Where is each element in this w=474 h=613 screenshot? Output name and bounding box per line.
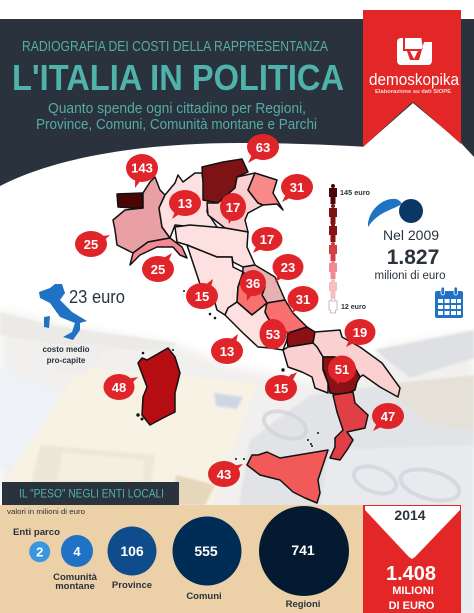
- region: Basilicata: [323, 357, 360, 395]
- bubble: Liguria 25: [142, 253, 174, 282]
- main title: L'ITALIA IN POLITICA: [12, 57, 344, 98]
- value bubbles: [75, 134, 404, 487]
- bubble: Puglia 19: 19: [353, 325, 367, 340]
- header title block: [12, 39, 344, 133]
- bubble: Trentino 63: 63: [256, 140, 270, 155]
- region: Lazio: [225, 302, 288, 350]
- region: Sardegna: [138, 348, 180, 425]
- header band: [0, 19, 474, 186]
- region: Liguria: [130, 238, 187, 265]
- logo wordmark: demoskopika: [369, 70, 459, 89]
- bubble: Abruzzo 31: [288, 286, 318, 313]
- bubble: Umbria 36: 36: [246, 276, 260, 291]
- bubble: Friuli 31: [281, 174, 313, 202]
- region: Trentino-Alto Adige: [202, 159, 248, 203]
- caption: costo medio: [42, 345, 90, 354]
- 23 euro value: 23 euro: [69, 287, 125, 307]
- panel: 2014 total: [363, 505, 461, 613]
- circle: Comuni: 555: [194, 543, 218, 559]
- bubble: Basilicata 51: 51: [335, 362, 349, 377]
- heading tab: [2, 482, 179, 505]
- circle: Comunità montane: [53, 535, 98, 592]
- bubble: Sicilia 43: 43: [217, 467, 231, 482]
- region: Valle d'Aosta: [117, 193, 143, 208]
- region: Veneto: [207, 173, 263, 232]
- caption: [42, 345, 90, 365]
- bubble: Umbria 36: [240, 270, 266, 301]
- subtitle: [36, 101, 317, 133]
- bubble: Abruzzo 31: 31: [296, 292, 310, 307]
- bubble: Campania 15: 15: [274, 381, 288, 396]
- bubble: Liguria 25: 25: [151, 262, 165, 277]
- icon: calendar: [435, 287, 463, 318]
- circle: Enti parco: Enti parco: [13, 527, 60, 538]
- circle: Enti parco: 2: [36, 544, 43, 560]
- panel: local bodies: [0, 482, 364, 613]
- bubble: Toscana 15: [186, 279, 218, 309]
- bubble: Emilia-Romagna 17: [252, 227, 282, 253]
- circle: Province: 106: [120, 543, 144, 559]
- region: Puglia: [313, 330, 400, 397]
- bubble: Marche 23: 23: [281, 260, 295, 275]
- unit: milioni di euro: [375, 270, 445, 282]
- bubble: Campania 15: [265, 372, 297, 401]
- bubble: Lombardia 13: 13: [178, 196, 192, 211]
- region: Emilia-Romagna: [175, 225, 255, 267]
- circle: Regioni: Regioni: [286, 599, 320, 610]
- bubble: Sicilia 43: [208, 461, 243, 487]
- circle: Comuni: Comuni: [186, 591, 222, 602]
- bubble: Molise 53: 53: [266, 327, 280, 342]
- region: Marche: [243, 265, 285, 303]
- circle: Comunità montane: 4: [73, 544, 81, 559]
- bubble: Trentino 63: [247, 134, 279, 163]
- circle: Comunità montane: Comunità: [53, 572, 98, 583]
- bubble: Toscana 15: 15: [195, 289, 209, 304]
- bubble: Puglia 19: [344, 319, 376, 347]
- bubble: Piemonte 25: 25: [84, 237, 98, 252]
- subtitle: Province, Comuni, Comunità montane e Parchi: [36, 117, 317, 133]
- bubble: Valle d'Aosta 143: 143: [131, 160, 153, 176]
- circle: Regioni: [259, 506, 349, 610]
- region: Abruzzo: [265, 300, 307, 333]
- minor islands: [136, 290, 319, 460]
- subtitle: Quanto spende ogni cittadino per Regioni,: [48, 101, 306, 117]
- region: Friuli-Venezia Giulia: [248, 173, 283, 210]
- bubble: Molise 53: [260, 319, 290, 349]
- bubble: Calabria 47: 47: [381, 409, 395, 424]
- amount: 1.827: [387, 246, 439, 269]
- bubble: Valle d'Aosta 143: [126, 154, 158, 188]
- circle: Comunità montane: montane: [55, 581, 95, 592]
- label: 145 euro: 145 euro: [340, 188, 370, 197]
- year: 2014: [394, 507, 426, 523]
- bubble: Lazio 13: 13: [220, 344, 234, 359]
- icon: Italy map: [39, 284, 87, 340]
- circle: Enti parco: [13, 527, 60, 562]
- bubble: Lombardia 13: [169, 190, 201, 219]
- bubble: Calabria 47: [372, 403, 404, 431]
- bubble: Emilia-Romagna 17: 17: [260, 232, 274, 247]
- region: Calabria: [330, 392, 368, 460]
- icon: blue arc and circle: [368, 199, 423, 227]
- bubble: Sardegna 48: [104, 374, 138, 400]
- circle: Regioni: 741: [291, 542, 315, 558]
- bubble: Marche 23: [272, 254, 304, 282]
- bubble: Basilicata 51: [328, 356, 356, 385]
- label: 12 euro: 12 euro: [341, 302, 366, 311]
- source note: Elaborazione su dati SIOPE: [375, 89, 452, 95]
- amount: 1.408: [386, 563, 436, 585]
- region: Lombardia: [159, 173, 222, 238]
- unit: MILIONI: [392, 585, 434, 597]
- bubble: Veneto 17: [220, 193, 246, 224]
- per-capita average: [39, 284, 125, 365]
- person figures: [329, 184, 337, 313]
- panel: 2014 total: DI EURO: [389, 600, 435, 612]
- region: Toscana: [187, 245, 243, 315]
- region: Sicilia: [247, 450, 328, 503]
- region: Piemonte: [113, 177, 170, 253]
- map of Italy: [113, 159, 400, 503]
- bubble: Friuli 31: 31: [290, 180, 304, 195]
- 2009 total: [368, 199, 463, 318]
- year label: Nel 2009: [383, 227, 439, 243]
- region: Campania: [283, 343, 328, 393]
- units note: valori in milioni di euro: [7, 507, 85, 516]
- circle: Comuni: [172, 516, 242, 602]
- background: euro banknotes: [0, 310, 474, 613]
- circle: Province: [108, 526, 156, 591]
- region: Molise: [287, 327, 315, 347]
- bubble: Veneto 17: 17: [226, 200, 240, 215]
- heading tab: IL "PESO" NEGLI ENTI LOCALI: [19, 488, 164, 500]
- bubble: Lazio 13: [211, 334, 243, 364]
- bubble: Piemonte 25: [75, 231, 110, 257]
- region: Umbria: [237, 273, 267, 315]
- bubble: Sardegna 48: 48: [112, 380, 126, 395]
- kicker: RADIOGRAFIA DEI COSTI DELLA RAPPRESENTANZA: [22, 39, 328, 55]
- circle: Province: Province: [112, 580, 152, 591]
- ribbon: demoskopika: [363, 10, 474, 175]
- icon: logo: [397, 36, 432, 65]
- legend: people scale: [329, 184, 370, 313]
- caption: pro-capite: [47, 356, 86, 365]
